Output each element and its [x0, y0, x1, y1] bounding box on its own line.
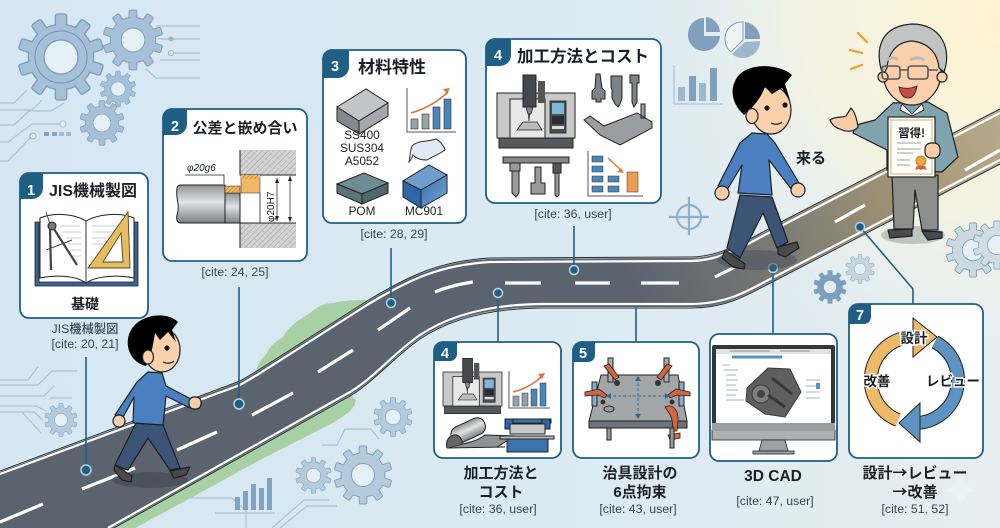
label: metals: SS400 — [344, 128, 380, 142]
heading 1: JIS機械製図 — [49, 181, 137, 200]
badge 7 — [849, 304, 871, 324]
badge 4 — [486, 39, 511, 66]
character: student walking toward mentor — [715, 66, 805, 270]
caption 1 — [52, 321, 118, 351]
diagram: shaft and hole fit — [177, 150, 296, 248]
icon: open book with compass and set square — [35, 212, 138, 286]
icon: sheet metal roll — [446, 415, 515, 448]
badge 3 — [323, 50, 349, 78]
caption 5: 6点拘束 — [613, 483, 667, 501]
badge 7: 7 — [856, 308, 864, 324]
caption 7: [cite: 51, 52] — [882, 502, 948, 516]
decoration: small bar chart — [674, 65, 723, 104]
caption 4 lower: コスト — [478, 484, 524, 501]
label: metals: A5052 — [345, 154, 379, 168]
caption 5: [cite: 43, user] — [599, 502, 677, 516]
label: metals — [340, 128, 384, 168]
caption 2: [cite: 24, 25] — [202, 265, 268, 279]
decoration: lower gears, bars and circuits — [0, 221, 1000, 528]
icon: jig plate with clamps — [585, 358, 690, 448]
badge 3: 3 — [331, 59, 339, 75]
caption 4 lower — [459, 464, 539, 516]
diagram: cycle arrows: 改善 — [864, 373, 890, 389]
diagram: cycle arrows: レビュー — [926, 373, 980, 389]
badge 2 — [163, 109, 187, 135]
caption 4 upper: [cite: 36, user] — [534, 207, 612, 221]
diagram: cycle arrows: 設計 — [900, 331, 928, 346]
badge 5: 5 — [579, 346, 587, 362]
decoration: sparkle — [943, 473, 977, 507]
caption 1: JIS機械製図 — [52, 321, 118, 336]
icon: CNC machine — [443, 358, 502, 414]
panel 4 upper: machining and cost — [486, 39, 661, 203]
badge 1 — [20, 173, 43, 199]
label: kuru: 来る — [796, 150, 826, 167]
icon: cutting tools — [592, 74, 639, 107]
character: student walking on road — [112, 315, 201, 488]
decoration: target icon — [669, 197, 709, 235]
panel 6: 3D CAD — [710, 334, 837, 461]
icon: monitor with CAD model — [712, 345, 835, 454]
caption 5: 治具設計の — [602, 464, 678, 482]
heading 2: 公差と嵌め合い — [192, 119, 298, 137]
decoration: pie charts — [688, 17, 760, 58]
icon: press brake — [500, 419, 554, 452]
road — [0, 109, 1000, 528]
green hill — [112, 300, 369, 528]
diagram: shaft and hole fit: φ20H7 — [266, 191, 277, 222]
icon: cost chart — [509, 371, 550, 408]
badge 2: 2 — [171, 119, 179, 135]
caption 6: 3D CAD — [744, 468, 802, 485]
label: MC901: MC901 — [405, 204, 443, 218]
heading 3: 材料特性 — [358, 58, 426, 77]
icon: steel block — [337, 89, 388, 134]
caption 1: [cite: 20, 21] — [52, 337, 118, 351]
icon: rising bar chart — [407, 88, 456, 132]
caption 5 — [599, 464, 678, 516]
caption 4 lower: 加工方法と — [463, 464, 539, 482]
caption 6 — [736, 468, 814, 508]
caption 6: [cite: 47, user] — [736, 494, 814, 508]
caption 3: [cite: 28, 29] — [360, 227, 428, 241]
connector lines and road markers — [81, 222, 913, 475]
caption 7: 設計→レビュー — [862, 462, 968, 483]
character: senior mentor holding certificate: 習得! — [898, 126, 925, 140]
caption 7 — [862, 462, 968, 516]
icon: sheet metal part — [584, 104, 652, 145]
label: metals: SUS304 — [340, 141, 384, 155]
badge 4: 4 — [494, 48, 502, 64]
label: POM: POM — [349, 204, 375, 218]
heading 4: 加工方法とコスト — [517, 46, 649, 66]
decoration: top-left gears and circuit lines — [0, 10, 200, 161]
icon: CNC machine — [497, 75, 575, 148]
panel 1: JIS drawing — [20, 173, 148, 318]
badge 4 lower: 4 — [441, 346, 449, 362]
icon: end mills — [503, 157, 569, 197]
badge 1: 1 — [27, 183, 35, 199]
icon: cost chart — [588, 151, 643, 196]
caption 7: →改善 — [892, 481, 938, 502]
panel 2: tolerance and fit — [163, 109, 307, 261]
panel 5: jig design — [573, 342, 699, 458]
icon: plastic sheet — [409, 139, 445, 162]
caption 4 lower: [cite: 36, user] — [459, 502, 537, 516]
diagram: shaft and hole fit: φ20g6 — [187, 163, 216, 174]
panel 7: design review improve cycle — [849, 304, 983, 458]
panel 4 lower: machining — [434, 342, 561, 458]
icon: POM block — [337, 173, 388, 204]
character: senior mentor holding certificate — [830, 24, 958, 244]
icon: MC901 block — [403, 165, 447, 208]
label: kiso: 基礎 — [71, 296, 99, 312]
diagram: cycle arrows — [864, 318, 980, 442]
panel 3: material properties — [323, 50, 466, 223]
